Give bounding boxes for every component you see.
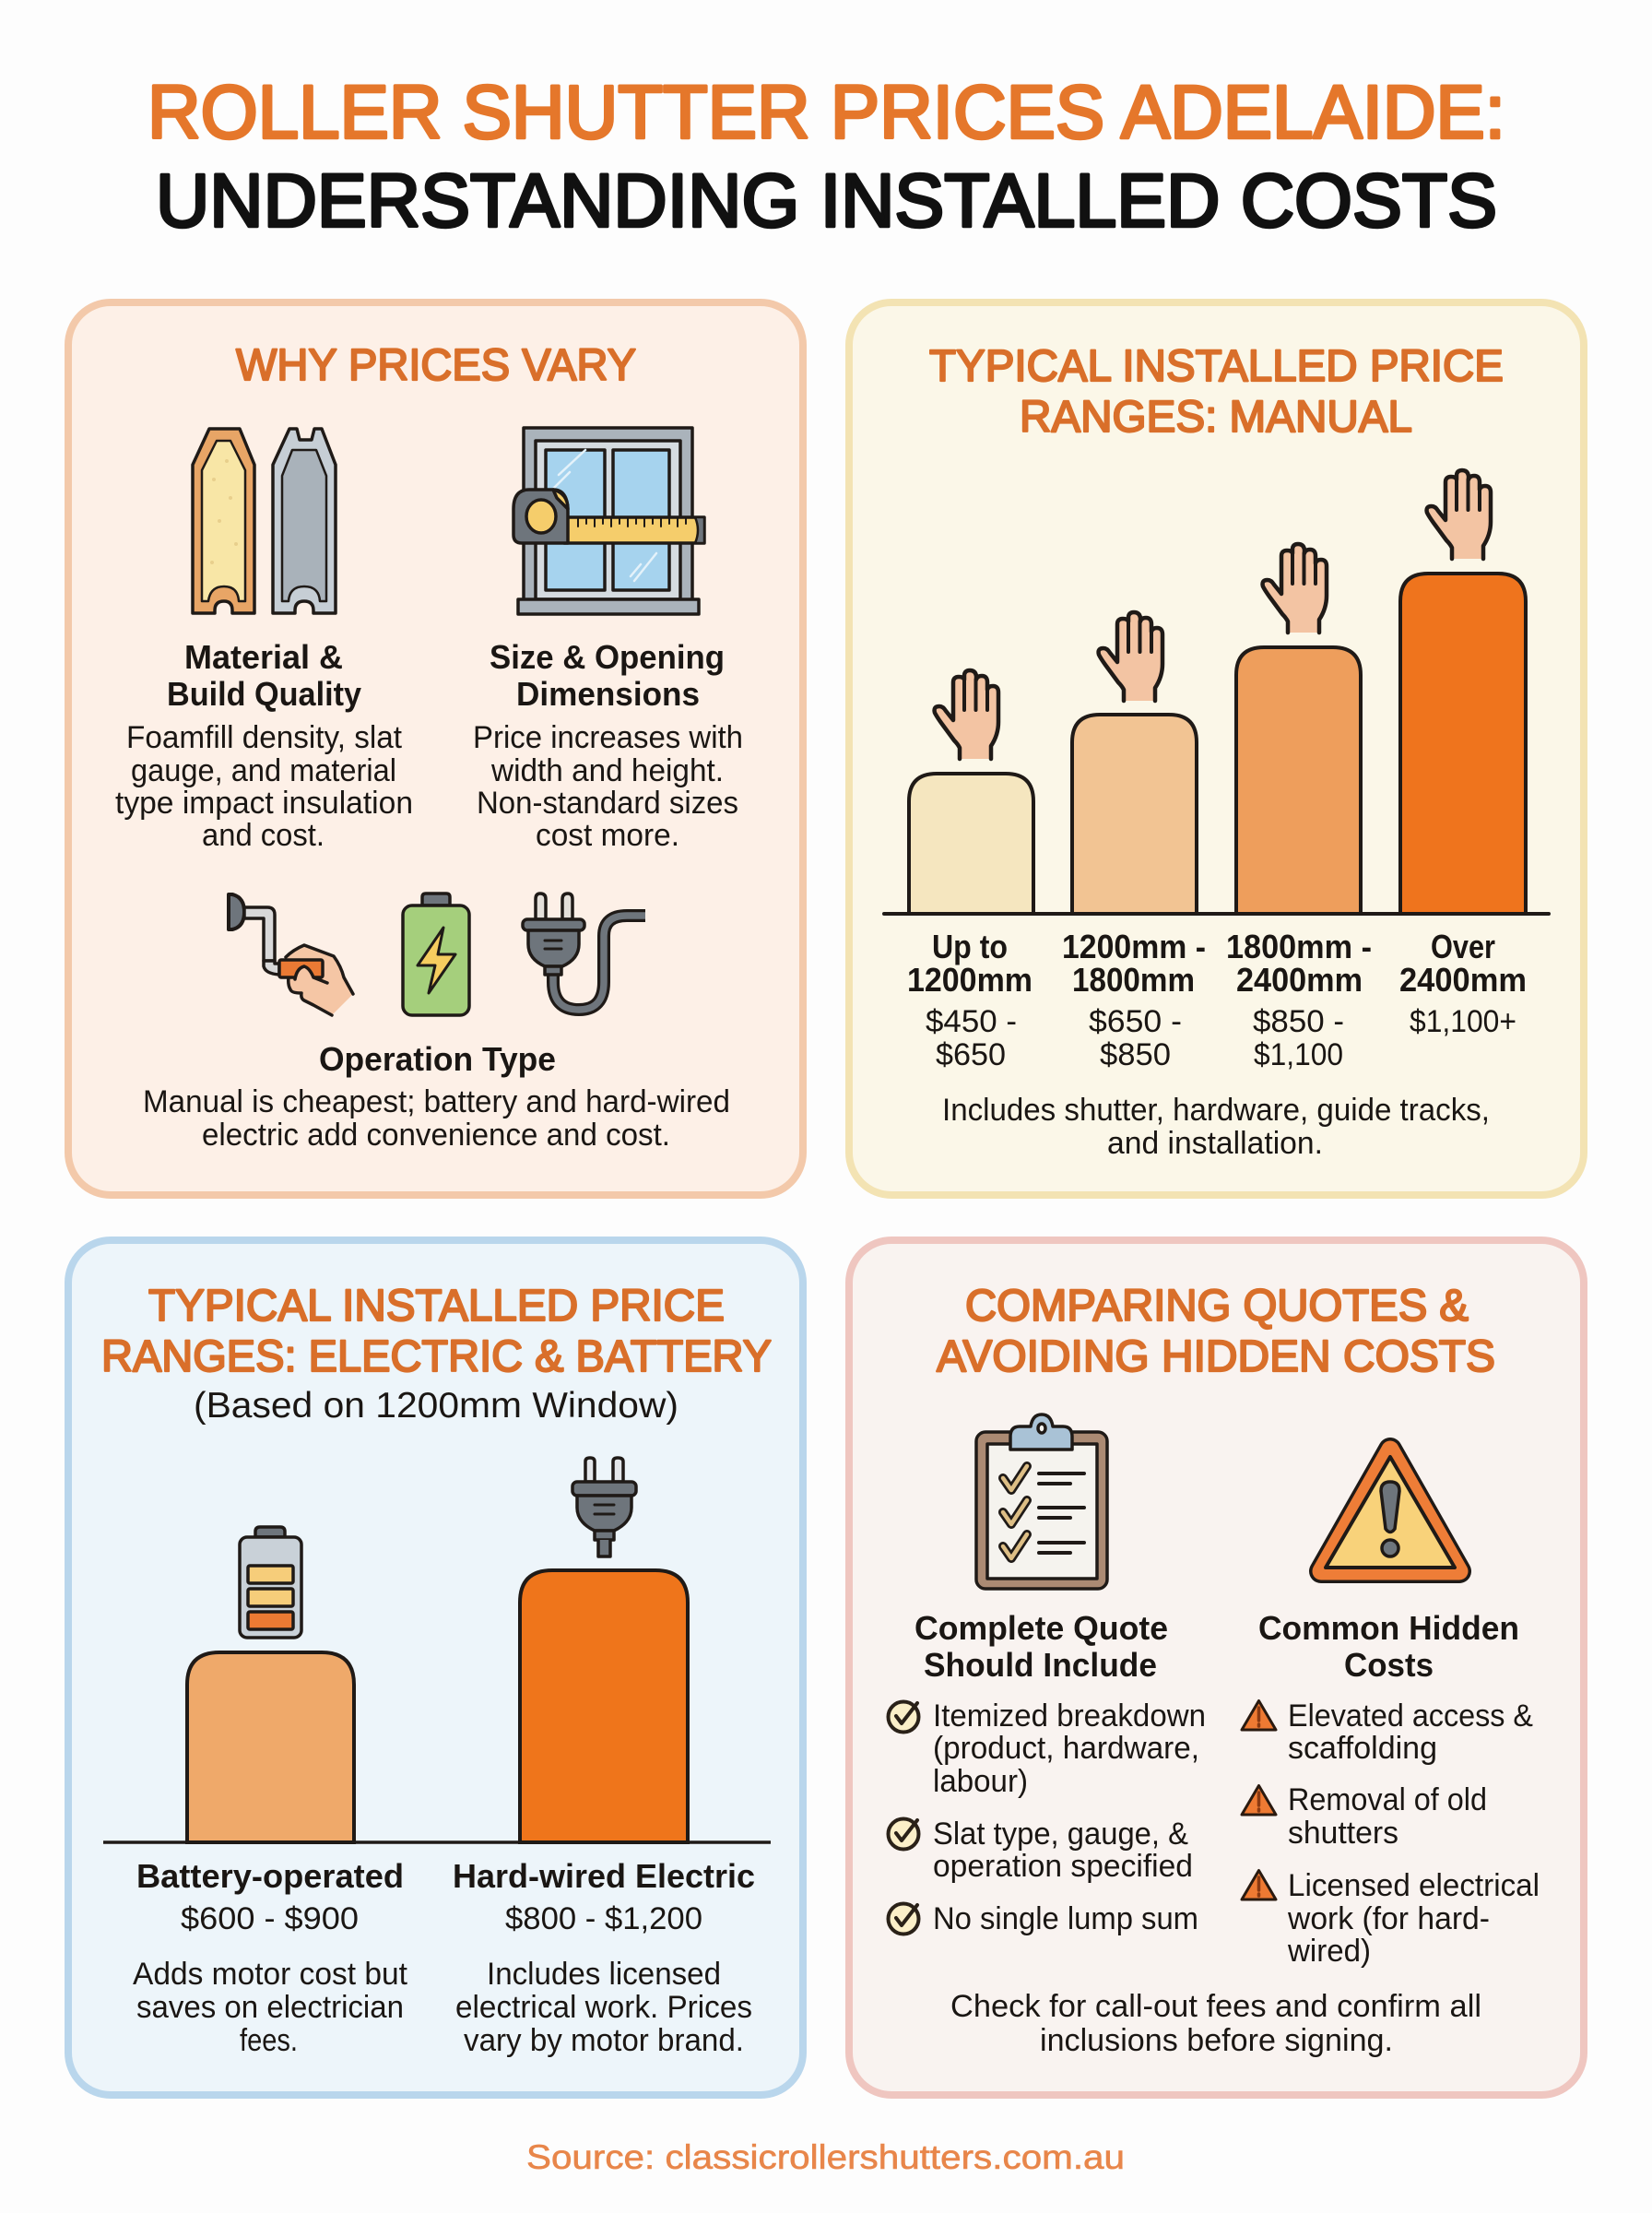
panel: electric and battery price ranges [68,1240,803,2095]
text: manual note: Includes shutter, hardware, guide tracks, [942,1093,1490,1128]
label: up to 1200mm: 1200mm [907,961,1032,999]
heading: common hidden costs [1258,1609,1519,1684]
bar: hard-wired electric [520,1570,688,1842]
item: slat type [933,1817,1193,1884]
bar chart: electric and battery prices [103,1458,771,1842]
bar: up to 1200mm [909,774,1033,914]
heading: electric and battery prices: TYPICAL INSTALLED PRICE [148,1282,725,1331]
label: 1200 to 1800mm: $850 [1100,1037,1171,1072]
list: quote inclusions [889,1698,1206,1936]
item: itemized breakdown [933,1698,1206,1799]
heading: common hidden costs: Common Hidden [1258,1609,1519,1647]
item: itemized breakdown: Itemized breakdown [933,1698,1206,1734]
panel: manual price ranges [849,302,1584,1195]
heading: electric and battery prices [101,1282,772,1381]
text: material description [115,720,413,853]
icon: foam-filled slat [193,429,254,613]
text: size description: width and height. [490,753,724,788]
heading: size and opening dimensions: Size & Opening [490,638,725,676]
label: hard-wired electric: Includes licensed [487,1957,721,1992]
icon: hand 2 [1099,612,1162,701]
icon: hand 4 [1427,470,1491,559]
heading: manual price ranges: RANGES: MANUAL [1020,393,1412,442]
item: elevated access: scaffolding [1288,1731,1437,1766]
item: licensed work: work (for hard- [1287,1901,1490,1936]
item: removal: shutters [1288,1816,1398,1851]
label: over 2400mm: Over [1431,928,1495,965]
label: battery-operated: Battery-operated [136,1857,404,1895]
item: itemized breakdown: (product, hardware, [933,1731,1199,1766]
icon: hand 1 [935,670,998,759]
text: operation description [143,1084,730,1153]
label: over 2400mm: $1,100+ [1410,1004,1516,1039]
item: removal [1288,1782,1487,1851]
label: 1200 to 1800mm: 1200mm - [1062,928,1206,965]
label: 1200 to 1800mm [1062,928,1206,1072]
label: hard-wired electric: $800 - $1,200 [505,1901,702,1936]
label: hard-wired electric: electrical work. Prices [455,1990,752,2025]
text: size description [473,720,743,853]
label: 1800 to 2400mm: 2400mm [1236,961,1363,999]
text: size description: Price increases with [473,720,743,755]
icon: check 2 [889,1818,918,1850]
item: licensed work [1287,1868,1540,1969]
heading: comparing quotes: AVOIDING HIDDEN COSTS [937,1332,1495,1381]
heading: comparing quotes [937,1282,1495,1381]
text: closing advice [950,1989,1481,2058]
panel: why prices vary [68,302,803,1195]
icon: warning 1 [1242,1700,1276,1730]
title: ROLLER SHUTTER PRICES ADELAIDE: [148,70,1505,155]
icon: battery level [240,1527,301,1638]
heading: size and opening dimensions [490,638,725,713]
label: 1200 to 1800mm: $650 - [1089,1004,1182,1039]
label: hard-wired electric: vary by motor brand. [464,2023,744,2058]
icon: warning triangle [1321,1450,1459,1571]
bar: 1200 to 1800mm [1072,715,1197,914]
label: over 2400mm [1399,928,1527,1039]
chart axis [884,912,1549,916]
heading: common hidden costs: Costs [1344,1646,1434,1684]
heading: complete quote: Should Include [924,1646,1157,1684]
heading: material and build quality: Build Quality [167,675,361,713]
label: up to 1200mm: $650 [936,1037,1006,1072]
item: no lump sum: No single lump sum [933,1901,1198,1936]
icon: warning 2 [1242,1785,1276,1815]
list: hidden costs [1242,1698,1540,1969]
item: removal: Removal of old [1288,1782,1487,1817]
label: over 2400mm: 2400mm [1399,961,1527,999]
icon: check 1 [889,1702,918,1732]
label: hard-wired electric [453,1857,755,2058]
heading: complete quote [914,1609,1168,1684]
text: manual note [942,1093,1490,1161]
title [148,70,1505,243]
label: battery-operated: Adds motor cost but [133,1957,408,1992]
heading: complete quote: Complete Quote [914,1609,1168,1647]
text: size description: cost more. [536,818,679,853]
heading: why prices vary: WHY PRICES VARY [236,341,636,390]
panel: comparing quotes [849,1240,1584,2095]
bar: battery-operated [187,1652,354,1842]
icon: clipboard checklist [976,1414,1107,1589]
icon: plug [572,1458,636,1556]
heading: material and build quality [167,638,361,713]
bar: over 2400mm [1400,574,1526,914]
heading: comparing quotes: COMPARING QUOTES & [965,1282,1469,1331]
label: up to 1200mm [907,928,1032,1072]
text: closing advice: inclusions before signing. [1040,2023,1393,2058]
label: 1200 to 1800mm: 1800mm [1072,961,1195,999]
item: elevated access [1288,1698,1533,1766]
heading: manual price ranges [929,342,1504,442]
icon: hand crank [229,894,353,1015]
item: licensed work: Licensed electrical [1288,1868,1540,1903]
source line: Source: classicrollershutters.com.au [526,2138,1125,2176]
text: closing advice: Check for call-out fees and confirm all [950,1989,1481,2024]
heading: operation type: Operation Type [319,1040,556,1078]
text: material description: and cost. [202,818,324,853]
label: up to 1200mm: $450 - [926,1004,1017,1039]
label: 1800 to 2400mm: $850 - [1253,1004,1344,1039]
chart axis [103,1840,771,1844]
text: manual note: and installation. [1107,1126,1323,1161]
item: slat type: operation specified [933,1849,1193,1884]
label: up to 1200mm: Up to [932,928,1008,965]
text: material description: type impact insulation [115,786,413,821]
subheading: (Based on 1200mm Window) [194,1386,678,1426]
item: licensed work: wired) [1287,1934,1371,1969]
label: hard-wired electric: Hard-wired Electric [453,1857,755,1895]
heading: material and build quality: Material & [184,638,343,676]
icon: window with tape measure [513,428,704,614]
label: battery-operated [133,1857,408,2058]
text: material description: gauge, and material [131,753,396,788]
item: itemized breakdown: labour) [933,1764,1028,1799]
heading: electric and battery prices: RANGES: ELECTRIC & BATTERY [101,1332,772,1381]
text: size description: Non-standard sizes [477,786,738,821]
text: operation description: Manual is cheapest; battery and hard-wired [143,1084,730,1119]
icon: battery with bolt [403,893,469,1015]
icon: check 3 [889,1903,918,1935]
item: slat type: Slat type, gauge, & [933,1817,1188,1852]
label: 1800 to 2400mm [1226,928,1372,1072]
heading: size and opening dimensions: Dimensions [516,675,700,713]
icon: aluminium slat [273,429,336,613]
label: battery-operated: fees. [240,2023,298,2058]
text: material description: Foamfill density, slat [126,720,403,755]
heading: manual price ranges: TYPICAL INSTALLED PRICE [929,342,1504,391]
icon: warning 3 [1242,1870,1276,1899]
item: elevated access: Elevated access & [1288,1698,1533,1734]
icon: plug with cord [523,893,645,1010]
label: battery-operated: $600 - $900 [181,1901,359,1936]
title: UNDERSTANDING INSTALLED COSTS [156,159,1497,243]
bar: 1800 to 2400mm [1236,647,1361,914]
label: battery-operated: saves on electrician [136,1990,404,2025]
label: 1800 to 2400mm: 1800mm - [1226,928,1372,965]
icon: hand 3 [1263,544,1327,633]
bar chart: manual prices [884,470,1549,914]
text: operation description: electric add convenience and cost. [202,1118,670,1153]
label: 1800 to 2400mm: $1,100 [1254,1037,1343,1072]
